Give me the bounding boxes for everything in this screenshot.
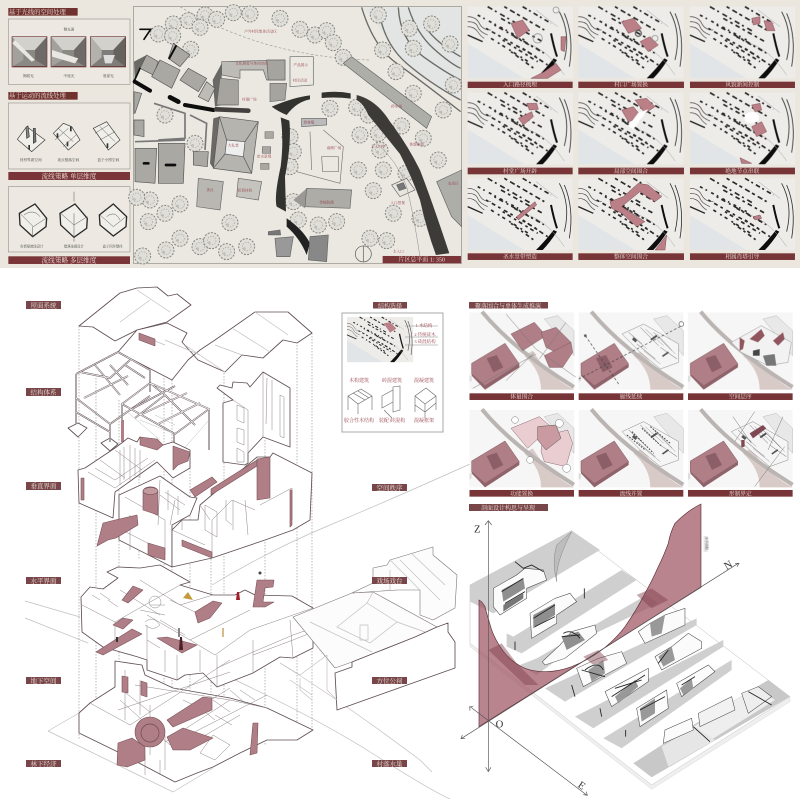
legend lines [405,322,438,345]
courtyard hall roof [213,117,258,173]
plan labels: 农田区 [448,180,459,185]
scene: spatial sequence [688,312,793,390]
top strip background [0,0,800,268]
thumbnail plan [347,317,413,362]
panel: light boxes: 底部光 [103,73,114,78]
layer: west vertical wall [78,437,190,518]
heading: section concept: 剖面设计构思与呈现 [481,504,535,512]
thumbnail: local enclosure [578,93,683,164]
panel: nine site strategy thumbnails: 村口广场置换 [614,81,648,89]
layer: tower wall segments [217,372,290,465]
pink underground walls [117,676,258,767]
scene: form definition [688,409,793,487]
axis lines [461,521,739,795]
panel: nine site strategy thumbnails: 村堂广场开辟 [503,167,537,175]
panel: multi layer: 错落连廊设计 [64,243,85,248]
thumbnail: village hall plaza [468,93,573,164]
shadow masses [134,55,307,208]
figures [116,572,262,650]
axis letters: N [723,559,735,572]
axonometric right labels: 村落水巢 [376,759,403,768]
panel: six massing scenes [469,312,793,497]
plan labels: 户外村民集体活动区 [244,29,277,34]
pink curved section plane [479,504,701,727]
axis letters: O [496,720,504,731]
heading: massing evolution: 聚落围合与单体生成推演 [475,302,542,310]
plan labels: 亲水景观 [257,154,272,159]
panel: six massing scenes: 体量围合 [510,393,533,401]
thumbnail: overall enclosure [578,178,683,250]
thumbnail: spire guidance [690,178,795,250]
panel: site master plan [129,5,462,264]
plane shadow on terrain [488,588,668,685]
panel: six massing scenes: 空间层序 [729,393,752,401]
panel: nine site strategy thumbnails: 整体空间围合 [614,253,648,261]
axonometric left labels: 水平界面 [30,576,57,585]
axonometric left labels [26,300,61,768]
banner: single layer strategy: 流线策略 单层维度 [42,171,97,180]
panel: nine site strategy thumbnails: 绝地节点串联 [725,167,760,175]
river [357,95,449,255]
west roofs [134,43,215,183]
panel: six massing scenes: 流线并置 [620,489,643,497]
plan labels: 大礼堂 [228,142,239,147]
panel: nine site strategy thumbnails [468,7,795,261]
scene: massing enclosure [469,312,576,390]
thumbnail: entrance path [468,7,573,78]
icon: light box three [91,37,125,67]
axis letters: E [575,780,587,793]
three structural type diagrams [344,377,436,424]
scene: corridor continuation [579,312,684,390]
heading: massing evolution [469,302,548,310]
stream channels [272,92,351,255]
plan labels: 入口景观 [390,200,405,205]
three structural type diagrams: 砖混建筑 [382,377,402,384]
heading: motion circulation: 基于运动的流线处理 [9,91,66,100]
plan labels: 茶社 [206,187,214,192]
terraces [362,7,461,112]
banner: multi layer strategy: 流线策略 多层维度 [42,255,97,264]
north buildings [197,57,462,262]
plan labels: 民俗体验 [238,187,253,192]
thumbnail: landscape corridor [690,7,795,78]
layer: structure system [68,352,209,470]
layer: underground space [48,660,313,792]
north arrow [355,246,371,262]
plan labels: 主入口亭 [371,143,386,148]
panel: nine site strategy thumbnails: 风貌新间控制 [725,81,760,89]
axis letters [474,525,735,793]
vertical dashed alignment lines [79,326,312,745]
platform [470,531,790,785]
axonometric left labels: 结构体系 [30,388,57,396]
heading: light space: 基于光线的空间处理 [9,7,66,16]
panel: single layer: 回形界面空间 [20,157,42,162]
upper section cut drawings [493,568,597,665]
panel: single layer: 盒子小围空间 [97,157,120,162]
lower section cut drawings [577,608,772,743]
icon: light box two [51,37,86,67]
layer: central vertical wall [97,476,197,567]
panel: left circulation strategies [8,7,130,264]
watercolor wash [363,7,461,100]
axonometric right labels: 戏场戏台 [376,576,403,585]
panel: multi layer: 盒子回环整体 [103,243,123,248]
legend lines: 1 木结构 [416,322,433,329]
panel: nine site strategy thumbnails: 圣水景带塑造 [503,253,537,261]
exploded axonometric [48,287,457,792]
layer: roof system [79,287,312,380]
panel: light boxes: 侧面光 [23,73,34,78]
panel: multi layer: 有情境流线设计 [20,243,44,248]
plan labels: 游客服 [303,120,315,125]
panel: six massing scenes: 廊线延续 [620,393,643,401]
panel: structure selection [342,302,443,432]
trees [129,5,461,264]
plan labels: 村民活动 [293,78,308,83]
scene: circulation juxtaposition [579,409,683,487]
axis letters: Z [474,525,481,536]
three structural type diagrams: 胶合性木结构 [344,417,374,424]
panel: multi layer [8,187,130,252]
section landscape diagram [461,504,790,795]
axonometric left labels: 屋面系统 [30,300,57,310]
three structural type diagrams: 装配 砖混构 [379,417,405,424]
axonometric right labels: 方位公祠 [376,676,403,685]
west courtyard building [280,592,455,710]
plan labels: 产品展示 [293,62,308,67]
axonometric left labels: 地下空间 [30,676,57,685]
legend lines: 3 砖混结构 [414,338,436,345]
three structural type diagrams: 混凝建筑 [414,377,434,384]
heading: section concept [469,504,548,512]
heading: light space [8,7,78,16]
plan labels: 休憩座椅 [409,142,424,147]
section vertical label: 水平面积 [705,537,710,551]
icon: light box one [12,37,47,67]
three structural type diagrams: 混凝框架 [414,417,434,424]
plan labels: 村落广场 [242,97,257,102]
layer: horizontal floor plane [81,565,313,687]
heading: motion circulation [8,91,78,100]
thumbnail: node linking [690,93,795,164]
heading: 结构选择 [378,302,402,310]
layer: east vertical wall [172,453,312,567]
panel: nine site strategy thumbnails: 入口路径梳理 [503,81,537,89]
plan labels: 文化展览与休闲空间 [235,60,268,65]
north theatre building [352,547,457,620]
axonometric right labels [372,483,407,768]
plan labels: 主入口 [393,249,404,254]
plan labels: 南侧广场 [327,145,342,150]
panel: single layer [8,103,130,169]
panel: nine site strategy thumbnails: 局部空间围合 [614,167,648,175]
thumbnail: plaza [578,7,683,78]
banner: master plan title [383,256,461,264]
panel: six massing scenes: 形制界定 [729,489,752,497]
section vertical label [704,536,710,552]
banner: master plan title: 片区总平面 1: 350 [398,256,445,264]
plan labels: 停车场 [391,104,402,109]
panel: six massing scenes: 功能置换 [510,489,533,497]
west yard walls [135,103,207,150]
black walls [135,29,248,165]
road lines behind the axonometric [25,464,470,799]
plan labels: 传统院落 [319,199,334,204]
panel: light boxes: 侧光面 [64,27,75,32]
thumbnail: water belt [468,178,573,250]
three structural type diagrams: 木构建筑 [349,377,369,384]
axonometric right labels: 空间秩序 [376,483,403,492]
panel: light boxes: 中庭光 [64,73,75,78]
axonometric left labels: 林下经济 [30,759,57,768]
panel: nine site strategy thumbnails: 相属肖塔引导 [725,253,760,261]
legend lines: 2 传统砖木 [414,331,436,338]
panel: single layer: 视点错落空间 [57,157,80,162]
banner: multi layer strategy [8,255,130,264]
panel: light boxes [8,19,130,84]
grey terrain bands [470,531,790,777]
banner: single layer strategy [8,171,130,180]
plan labels [206,29,459,254]
scene: function replacement [469,409,574,487]
axonometric left labels: 垂直界面 [30,481,57,490]
highlighted pink floor slabs [96,580,274,655]
